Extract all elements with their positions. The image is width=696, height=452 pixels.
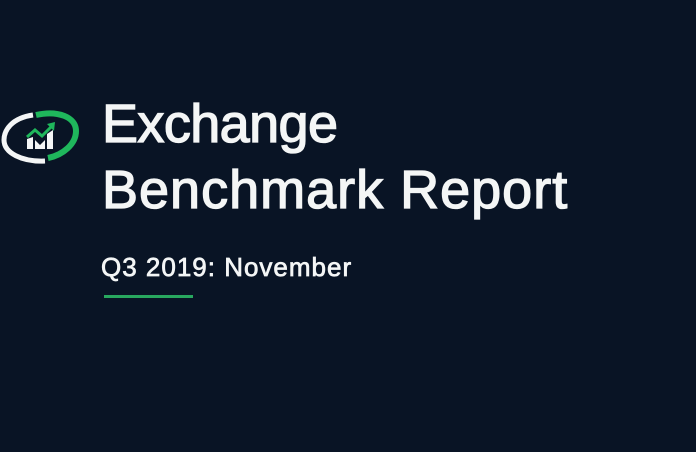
icon: exchange logo (2, 110, 79, 164)
title: Benchmark Report (102, 160, 568, 220)
subtitle: Q3 2019: November (101, 252, 352, 282)
accent underline (104, 295, 193, 298)
title (102, 94, 568, 220)
title: Exchange (102, 94, 337, 154)
